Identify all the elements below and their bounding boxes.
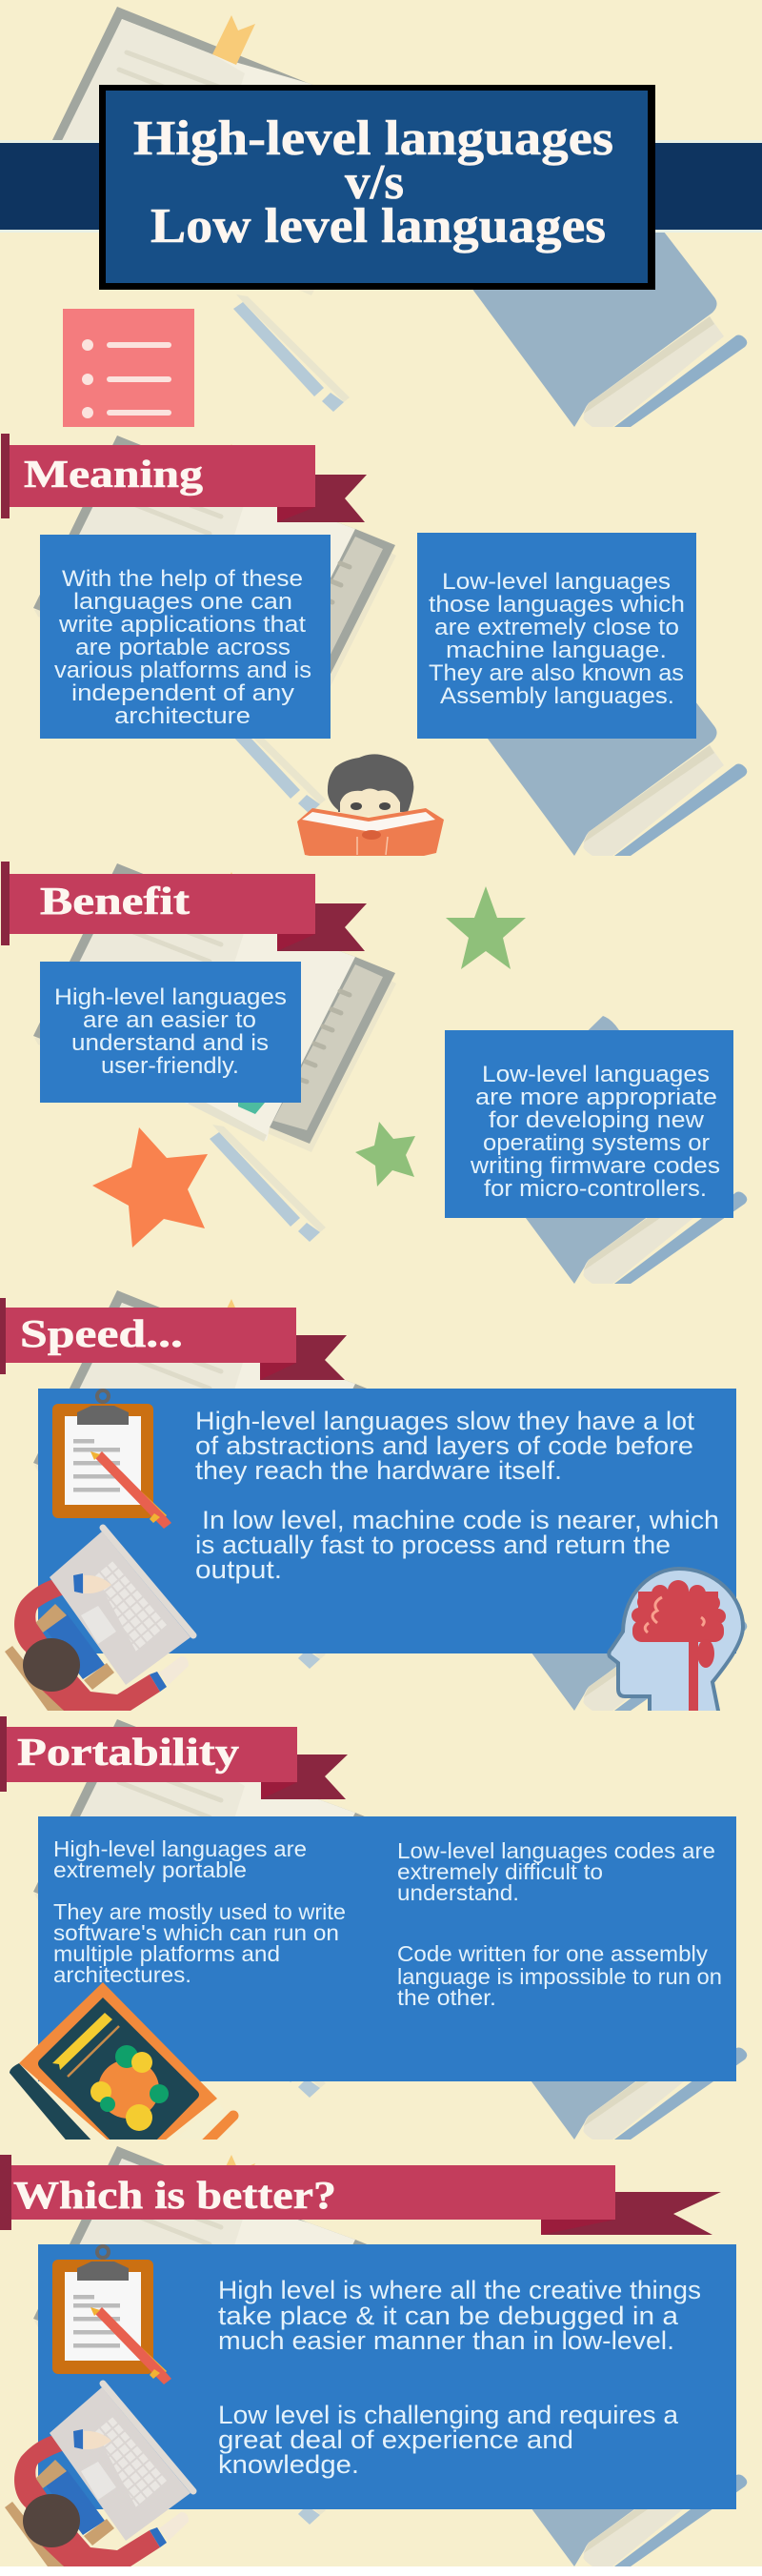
background pen 6	[210, 2407, 326, 2525]
background scene: books 6	[33, 2146, 747, 2566]
text box: low-level benefit: Low-level languages	[482, 1062, 710, 1087]
icon: orange star	[92, 1127, 208, 1247]
text box: portability: the other.	[397, 1985, 496, 2010]
text box: portability: extremely portable	[53, 1857, 247, 1882]
title box: High-level languages	[133, 112, 613, 166]
heading ribbon: Which is better: Which is better?	[13, 2173, 336, 2217]
text box: which is better: Low level is challenging and requires a	[218, 2401, 679, 2429]
title box	[99, 85, 655, 290]
text box: low-level meaning: Assembly languages.	[440, 683, 674, 709]
text box: speed: In low level, machine code is nearer, which	[202, 1506, 719, 1534]
icon: clipboard 2	[52, 2246, 171, 2384]
text box: portability: Low-level languages codes are	[397, 1838, 715, 1863]
text box: which is better	[38, 2244, 736, 2509]
text box: which is better: much easier manner than in low-level.	[218, 2326, 674, 2355]
icon: clipboard 1	[52, 1390, 171, 1529]
text box: low-level meaning	[417, 533, 696, 739]
text box: speed: High-level languages slow they have a lot	[195, 1407, 695, 1435]
text box: portability: High-level languages are	[53, 1836, 307, 1861]
icon: person at laptop 1	[5, 1528, 193, 1711]
text box: portability: Code written for one assembly	[397, 1941, 709, 1966]
text box: low-level benefit: operating systems or	[483, 1130, 710, 1156]
text box: high-level benefit: are an easier to	[83, 1007, 256, 1033]
text box: speed: of abstractions and layers of code before	[195, 1431, 693, 1460]
text box: high-level benefit	[40, 962, 301, 1103]
text box: portability	[38, 1816, 736, 2081]
text box: high-level meaning: languages one can	[73, 589, 292, 615]
heading ribbon: Benefit: Benefit	[40, 879, 190, 923]
background pen 2	[210, 697, 326, 814]
background scene: books 1	[33, 7, 747, 427]
text box: which is better: knowledge.	[218, 2450, 359, 2479]
text box: low-level meaning: Low-level languages	[442, 569, 671, 595]
text box: portability: software's which can run on	[53, 1920, 339, 1945]
background scene: books 5	[33, 1719, 747, 2140]
heading ribbon: Meaning	[1, 434, 367, 522]
title band	[0, 140, 762, 233]
title box: Low level languages	[150, 199, 606, 254]
text box: speed: is actually fast to process and return the	[195, 1531, 671, 1559]
background scene: books 2	[33, 436, 747, 856]
text box: speed: output.	[195, 1555, 282, 1584]
background pen 4	[210, 1552, 326, 1669]
heading ribbon: Speed	[0, 1298, 347, 1380]
text box: portability: multiple platforms and	[53, 1941, 280, 1966]
text box: high-level benefit: High-level languages	[54, 984, 287, 1010]
text box: low-level meaning: those languages which	[429, 592, 685, 618]
text box: low-level benefit: writing firmware codes	[470, 1153, 720, 1179]
background pen 3	[210, 1125, 326, 1242]
text box: high-level meaning: write applications that	[58, 612, 306, 638]
text box: portability: understand.	[397, 1880, 519, 1905]
text box: low-level benefit	[445, 1030, 733, 1218]
icon: person reading	[297, 754, 444, 856]
heading ribbon: Portability	[0, 1716, 348, 1799]
text box: high-level benefit: understand and is	[71, 1030, 269, 1056]
text box: high-level meaning: various platforms and is	[54, 658, 311, 683]
text box: which is better: take place & it can be debugged in a	[218, 2302, 679, 2330]
text box: which is better: High level is where all the creative things	[218, 2276, 701, 2304]
heading ribbon: Speed: Speed...	[20, 1311, 183, 1355]
text box: high-level benefit: user-friendly.	[101, 1053, 239, 1079]
background scene: books 4	[33, 1290, 747, 1711]
text box: high-level meaning: With the help of these	[62, 566, 303, 592]
icon: person at laptop 2	[5, 2383, 193, 2566]
text box: which is better: great deal of experience and	[218, 2425, 573, 2454]
text box: low-level meaning: They are also known as	[429, 660, 684, 686]
text box: portability: extremely difficult to	[397, 1859, 603, 1884]
text box: low-level benefit: for micro-controllers.	[484, 1176, 707, 1202]
title box: v/s	[345, 155, 404, 210]
text box: portability: They are mostly used to write	[53, 1899, 346, 1924]
text box: portability: language is impossible to run on	[397, 1964, 722, 1989]
text box: high-level meaning	[40, 535, 331, 739]
heading ribbon: Benefit	[1, 862, 367, 951]
text box: low-level benefit: for developing new	[489, 1107, 705, 1133]
background pen 1	[233, 294, 350, 412]
text box: low-level benefit: are more appropriate	[475, 1085, 717, 1110]
text box: low-level meaning: machine language.	[446, 638, 667, 663]
text box: high-level meaning: independent of any	[71, 680, 294, 706]
icon: large green star	[446, 886, 526, 969]
text box: speed: they reach the hardware itself.	[195, 1456, 562, 1485]
text box: high-level meaning: architecture	[114, 703, 251, 729]
heading ribbon: Meaning: Meaning	[24, 452, 204, 496]
text box: speed	[38, 1389, 736, 1653]
background pen 5	[210, 1980, 326, 2098]
background scene: books 3	[33, 863, 747, 1284]
text box: low-level meaning: are extremely close to	[434, 615, 679, 640]
heading ribbon: Portability: Portability	[17, 1730, 240, 1774]
icon: tablet book	[10, 1982, 233, 2144]
icon: small green star	[355, 1122, 415, 1187]
heading ribbon: Which is better	[0, 2155, 721, 2235]
text box: high-level meaning: are portable across	[75, 635, 291, 660]
icon: head with brain	[609, 1569, 743, 1715]
icon: pink list	[63, 309, 194, 427]
text box: portability: architectures.	[53, 1962, 191, 1987]
